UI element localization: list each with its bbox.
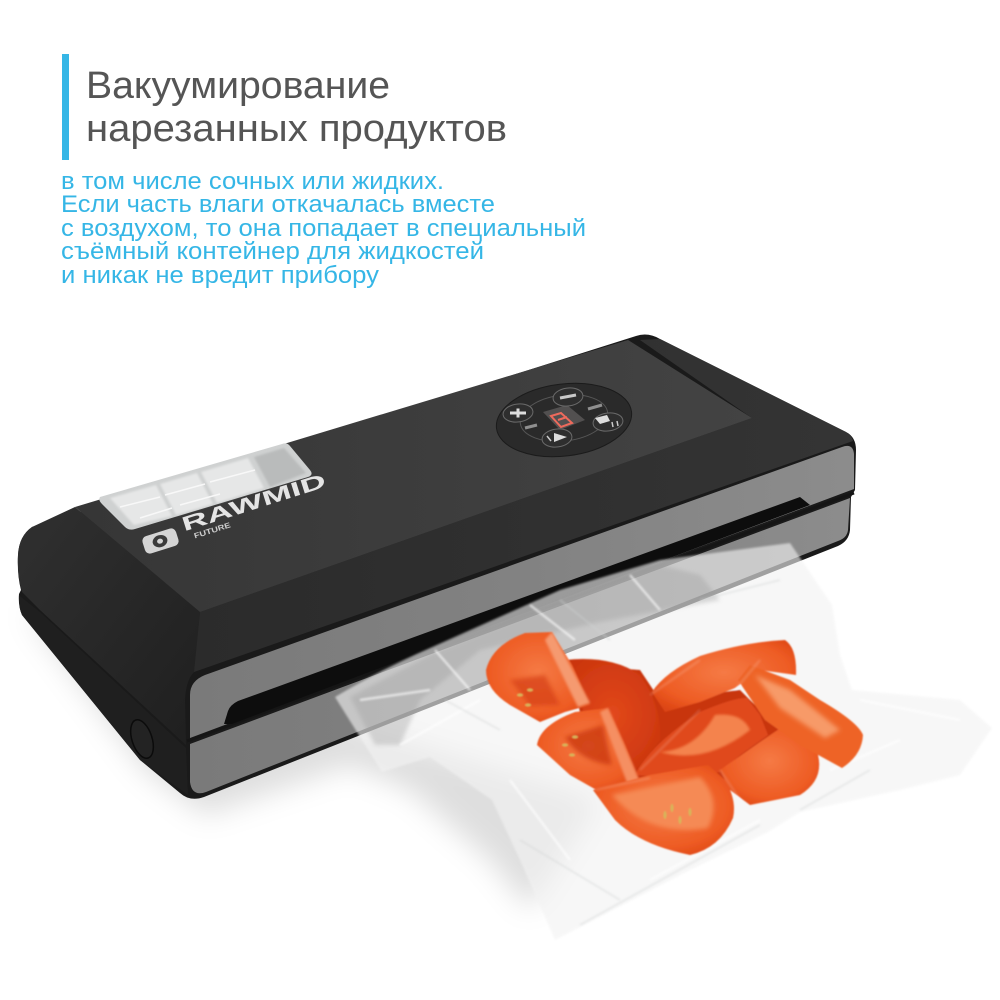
bag slot [224, 497, 810, 724]
start button [541, 427, 573, 449]
upper gray front panel [190, 446, 854, 738]
tomato slices [486, 632, 863, 855]
logo tagline: FUTURE [193, 520, 232, 540]
vacuum sealer device [18, 335, 856, 799]
title [86, 65, 507, 150]
dark juice base [570, 665, 790, 790]
description text: съёмный контейнер для жидкостей [61, 238, 484, 265]
front dark band [194, 339, 853, 672]
seam line [187, 493, 854, 741]
lower base side [19, 596, 188, 795]
slice: bottom [593, 765, 734, 855]
tomato seeds [517, 688, 692, 824]
slice: dark back left [565, 659, 660, 770]
description text [61, 168, 586, 289]
slice: right strip [738, 665, 863, 768]
seal button [592, 411, 624, 433]
slice: centre [635, 698, 768, 778]
film creases [445, 580, 870, 925]
slice: lower right [720, 725, 819, 805]
description text: Если часть влаги откачалась вместе [61, 191, 495, 218]
brand logo [138, 470, 331, 556]
top panel [75, 340, 752, 612]
display [543, 405, 585, 430]
body silhouette [18, 335, 856, 799]
title: нарезанных продуктов [86, 108, 507, 150]
left end cap [18, 507, 200, 745]
transparent liquid container window [99, 443, 312, 530]
slice: lower left [537, 708, 640, 792]
film highlights [360, 575, 960, 880]
slice lower left core [565, 725, 612, 765]
description text: в том числе сочных или жидких. [61, 168, 444, 195]
plus button [502, 402, 534, 424]
description text: с воздухом, то она попадает в специальный [61, 215, 586, 242]
minus button [552, 386, 584, 408]
film sheen on tomatoes [595, 660, 760, 800]
accent bar [62, 54, 69, 160]
title: Вакуумирование [86, 65, 390, 107]
wedge skin lower left [600, 708, 640, 785]
floor shadow [25, 610, 600, 910]
logo icon [141, 527, 180, 555]
bag film [335, 543, 992, 940]
wedge skin upper left [545, 632, 590, 707]
power button [126, 717, 158, 761]
control panel [492, 376, 636, 464]
indicator bars [525, 405, 602, 428]
film over device [350, 565, 720, 745]
lower gray front panel [190, 498, 850, 793]
digit [551, 413, 572, 427]
vacuum bag [335, 543, 992, 940]
logo wordmark: RAWMID [179, 470, 329, 536]
upper left core [510, 675, 560, 706]
slice centre flesh [660, 715, 750, 756]
slice: upper right [652, 640, 796, 712]
description text: и никак не вредит прибору [61, 262, 379, 289]
slice: upper left [486, 632, 590, 722]
